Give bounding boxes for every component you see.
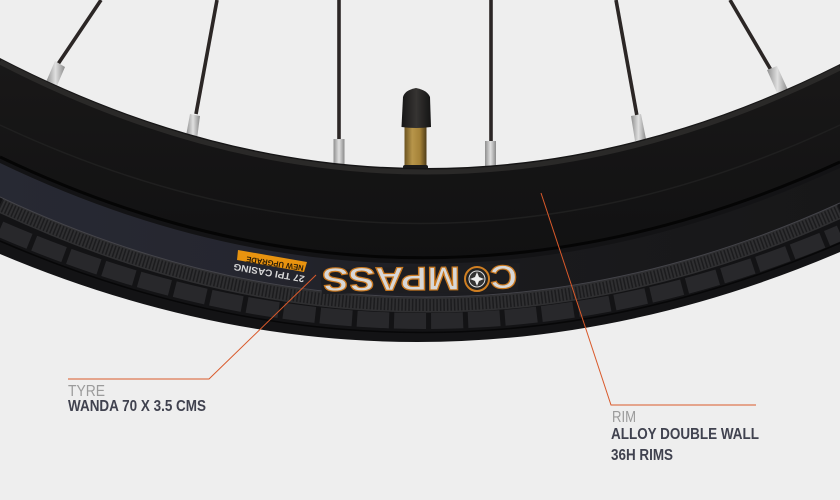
rim leader line [541, 193, 756, 405]
tyre [0, 157, 840, 342]
casing text: 27 TPI CASING [233, 261, 306, 284]
valve brass stem [404, 127, 426, 167]
rim top edge highlight [0, 62, 840, 172]
compass logo emblem [465, 267, 489, 291]
tyre branding [233, 250, 520, 298]
valve [402, 88, 431, 172]
tyre sidewall [0, 163, 840, 297]
rim specification: ALLOY DOUBLE WALL [611, 426, 759, 443]
tyre callout [68, 275, 316, 415]
tyre branding: NEW UPGRADE [245, 254, 304, 272]
rim [0, 58, 840, 259]
rim specification [611, 426, 759, 464]
tyre body [0, 157, 840, 342]
tyre specification: WANDA 70 X 3.5 CMS [68, 398, 206, 415]
tread blocks [0, 229, 840, 321]
compass wordmark: MPASS [322, 260, 460, 298]
rim label: RIM [612, 409, 636, 426]
tyre rim gap line [0, 157, 840, 258]
tyre leader line [68, 275, 316, 379]
compass logo backing [320, 263, 520, 294]
valve cap [402, 88, 431, 128]
tyre ridge strip [0, 205, 840, 305]
rim specification: 36H RIMS [611, 447, 673, 464]
new upgrade tag [237, 250, 307, 272]
rim callout [541, 193, 759, 464]
compass wordmark [322, 259, 517, 298]
compass wordmark: C [490, 259, 517, 296]
tyre label: TYRE [68, 383, 105, 400]
spokes and nipples [46, 0, 788, 168]
